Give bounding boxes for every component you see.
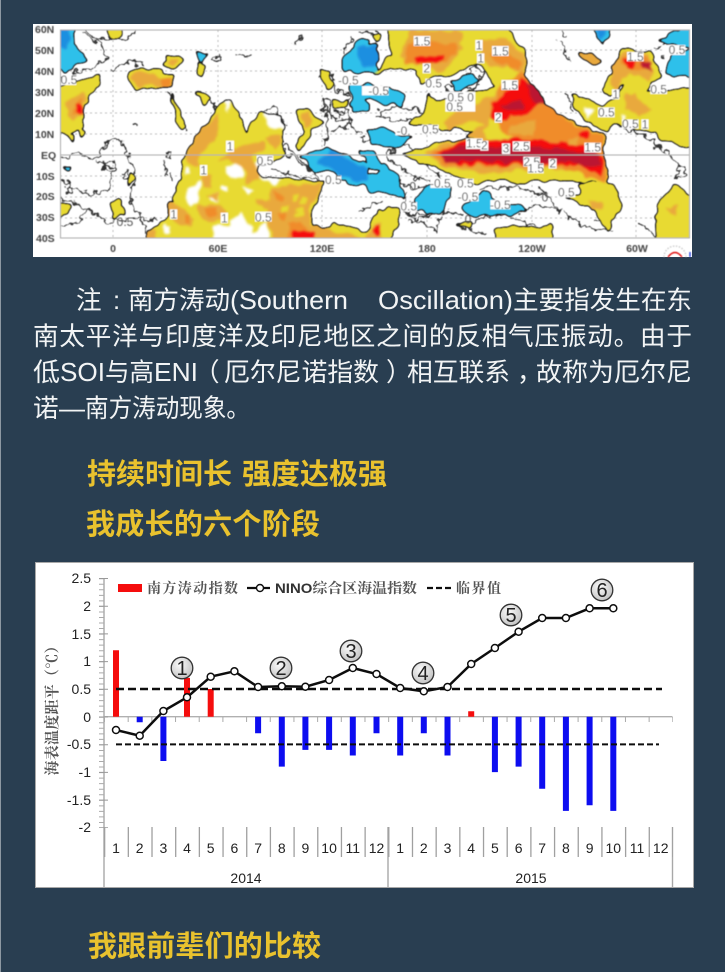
stage markers 1 to 6: 6	[596, 580, 608, 602]
map latitude labels: EQ	[41, 150, 56, 162]
map longitude labels: 180	[418, 243, 436, 255]
heading: six stages of growth: 我成长的六个阶段	[86, 508, 320, 541]
chart y-axis title: 海表温度距平（℃）	[43, 638, 61, 776]
map contour labels east: 0.5	[422, 122, 439, 136]
map contour labels west: 0.5	[325, 173, 342, 187]
stage markers 1 to 6: 1	[176, 658, 188, 680]
chart month labels: 4	[467, 840, 475, 856]
map contour labels east: 0.5	[669, 43, 686, 57]
map contour labels east: -0.	[397, 124, 411, 138]
text block: note on the Southern Oscillation: 与高	[105, 358, 154, 387]
map contour labels west: 1	[227, 140, 234, 154]
map contour labels east: 1	[612, 88, 619, 102]
chart month labels: 2	[420, 840, 428, 856]
map contour labels west: -0.5	[338, 74, 359, 88]
text block: note on the Southern Oscillation: （	[194, 359, 220, 387]
chart month labels: 5	[491, 840, 499, 856]
map contour labels east: 1.5	[627, 50, 644, 64]
bar series: Southern Oscillation index	[113, 650, 616, 811]
chart month labels: 1	[112, 840, 120, 856]
map longitude labels: 60W	[626, 243, 648, 255]
map latitude labels: 60N	[35, 24, 54, 36]
map contour labels east: 1	[642, 117, 649, 131]
text block: note on the Southern Oscillation: ）	[386, 359, 412, 387]
map contour labels west: 1	[170, 207, 177, 221]
map contour labels east: 2.5	[513, 139, 530, 153]
chart year labels	[230, 870, 547, 886]
chart y-axis labels: -0.5	[67, 736, 91, 752]
chart y-axis labels: 0.5	[72, 681, 91, 697]
text block: note on the Southern Oscillation: 南太平洋与印度洋及印尼地区之间的反相气压振动。由于	[33, 322, 692, 351]
map contour labels east: 0.5	[400, 200, 417, 214]
text block: note on the Southern Oscillation: SOI	[60, 359, 105, 387]
map latitude labels: 20S	[36, 191, 55, 203]
map longitude labels: 60E	[209, 243, 227, 255]
threshold dashed lines	[116, 689, 662, 744]
text block: note on the Southern Oscillation: 诺	[33, 394, 59, 423]
chart month labels: 7	[538, 840, 546, 856]
map contour labels east: 0	[465, 212, 472, 226]
map contour labels east: 1.5	[527, 162, 544, 176]
map contour labels east: 0.5	[446, 100, 463, 114]
heading: comparison with predecessors: 我跟前辈们的比较	[88, 930, 321, 963]
map grid lines	[60, 30, 690, 238]
map contour labels east: -0.5	[490, 198, 511, 212]
map longitude labels: 120W	[518, 243, 546, 255]
chart y-axis labels: 1.5	[72, 626, 91, 642]
chart month labels: 6	[515, 840, 523, 856]
text block: note on the Southern Oscillation: 厄尔尼诺指数	[224, 358, 379, 387]
map contour labels east: 2.5	[523, 155, 540, 169]
map contour labels east: 0	[409, 180, 416, 194]
chart y-axis labels: -2	[79, 819, 91, 835]
chart y-axis labels: 2	[83, 598, 91, 614]
chart y-axis labels: -1.5	[67, 792, 91, 808]
map latitude labels: 20N	[35, 108, 54, 120]
chart y-axis labels: 2.5	[72, 570, 91, 586]
chart month labels: 11	[630, 840, 644, 856]
chart year labels: 2015	[515, 870, 547, 886]
chart month labels: 9	[586, 840, 594, 856]
stage markers 1 to 6: 5	[505, 605, 517, 627]
chart y-axis labels: 0	[83, 709, 91, 725]
line series: NINO index	[112, 605, 617, 739]
map longitude labels: 120E	[310, 243, 334, 255]
map anomaly field	[53, 23, 695, 248]
map contour labels east: -0.5	[430, 176, 451, 190]
text block: note on the Southern Oscillation: ENI	[154, 359, 198, 387]
chart month labels: 10	[321, 840, 337, 856]
map contour labels east: 0.5	[650, 82, 667, 96]
text block: note on the Southern Oscillation: 南方涛动现象。	[85, 394, 250, 423]
chart legend: 临界值	[456, 580, 501, 597]
map latitude labels: 10S	[36, 171, 55, 183]
map contour labels east: 1.5	[501, 78, 518, 92]
stage markers 1 to 6: 3	[345, 641, 357, 663]
chart y-axis labels: -1	[79, 764, 91, 780]
map contour labels east: 2	[481, 139, 488, 153]
chart month labels: 3	[160, 840, 168, 856]
map contour labels west: 0.5	[257, 154, 274, 168]
chart month labels: 3	[444, 840, 452, 856]
map contour labels west: 0.5	[255, 210, 272, 224]
text block: note on the Southern Oscillation: 主要指发生在东	[513, 286, 692, 315]
panel: SOI and NINO index chart	[36, 562, 694, 888]
map contour labels east: -0.5	[458, 190, 479, 204]
map contour labels east: 1	[476, 39, 483, 53]
text block: note on the Southern Oscillation	[33, 286, 692, 423]
map contour labels east: 2	[495, 111, 502, 125]
map contour labels east: 0	[542, 190, 549, 204]
text block: note on the Southern Oscillation: 注	[76, 286, 102, 315]
map latitude labels: 40S	[36, 233, 55, 245]
chart month labels: 4	[183, 840, 191, 856]
chart y-axis labels: 1	[83, 653, 91, 669]
map longitude labels: 0	[110, 243, 116, 255]
map contour labels east: 2	[423, 62, 430, 76]
map contour labels east: 1.5	[414, 34, 431, 48]
map contour labels west: 1	[221, 211, 228, 225]
chart month labels: 9	[302, 840, 310, 856]
map contour labels east: 1.5	[466, 137, 483, 151]
chart month labels: 6	[231, 840, 239, 856]
map latitude labels: 50N	[35, 45, 54, 57]
chart legend: 南方涛动指数	[147, 580, 238, 597]
map contour labels west: 0.5	[61, 73, 78, 87]
heading: long duration, extreme strength: 强度达极强	[242, 458, 387, 491]
stage markers 1 to 6	[171, 579, 613, 685]
panel: sea surface temperature anomaly map	[33, 23, 695, 257]
stage markers 1 to 6: 4	[417, 663, 429, 685]
text block: note on the Southern Oscillation: 南方涛动	[128, 286, 230, 315]
map frame	[60, 30, 690, 238]
heading: long duration, extreme strength: 持续时间长	[87, 459, 232, 491]
map contour labels east: 2	[549, 157, 556, 171]
chart month labels: 11	[346, 840, 360, 856]
map contour labels east: 1.5	[584, 141, 601, 155]
chart y-axis labels	[67, 570, 91, 835]
chart legend: NINO综合区海温指数	[275, 580, 417, 597]
chart month labels: 12	[369, 840, 384, 856]
map contour labels east: 3	[503, 142, 510, 156]
chart month labels: 8	[278, 840, 286, 856]
stage markers 1 to 6: 2	[275, 658, 287, 680]
text block: note on the Southern Oscillation: Oscillation)	[378, 287, 513, 315]
map contour labels west: 1	[200, 164, 207, 178]
text block: note on the Southern Oscillation: :	[113, 287, 120, 315]
text block: note on the Southern Oscillation: ，	[517, 359, 543, 387]
map contour labels east: 1	[477, 52, 484, 66]
map contour labels west	[61, 73, 362, 229]
text block: note on the Southern Oscillation: 低	[33, 358, 60, 387]
text block: note on the Southern Oscillation: 故称为厄尔尼	[536, 358, 692, 387]
map contour labels east: 0.5	[598, 105, 615, 119]
text block: note on the Southern Oscillation: (Southern	[230, 287, 348, 315]
chart month labels	[112, 840, 669, 856]
map longitude labels	[110, 243, 648, 255]
chart month labels: 2	[136, 840, 144, 856]
chart month labels: 5	[207, 840, 215, 856]
map contour labels east: 1.5	[492, 44, 509, 58]
map latitude labels: 10N	[35, 129, 54, 141]
map contour labels east: -0.5 0	[443, 91, 474, 105]
chart month labels: 12	[653, 840, 669, 856]
map contour labels east: 0.5	[425, 76, 442, 90]
chart month labels: 8	[562, 840, 570, 856]
map latitude labels: 30N	[35, 87, 54, 99]
icon: logo mark	[664, 246, 690, 257]
chart month labels: 7	[254, 840, 262, 856]
map contour labels east: 0.5	[558, 186, 575, 200]
map contour labels east: 0.5	[622, 117, 639, 131]
map contour labels east: -0.5	[368, 84, 389, 98]
chart legend	[118, 580, 501, 597]
map latitude labels: 30S	[36, 212, 55, 224]
chart axes and ticks	[102, 578, 673, 887]
map latitude labels	[35, 24, 56, 245]
text block: note on the Southern Oscillation: 相互联系	[407, 358, 510, 387]
map latitude labels: 40N	[35, 66, 54, 78]
text block: note on the Southern Oscillation: —	[59, 395, 85, 423]
map contour labels west: 0.5	[117, 215, 134, 229]
chart year labels: 2014	[230, 870, 262, 886]
chart month labels: 1	[396, 840, 404, 856]
map contour labels east: 0.5	[457, 176, 474, 190]
chart month labels: 10	[606, 840, 621, 856]
map contour labels east	[362, 34, 686, 226]
